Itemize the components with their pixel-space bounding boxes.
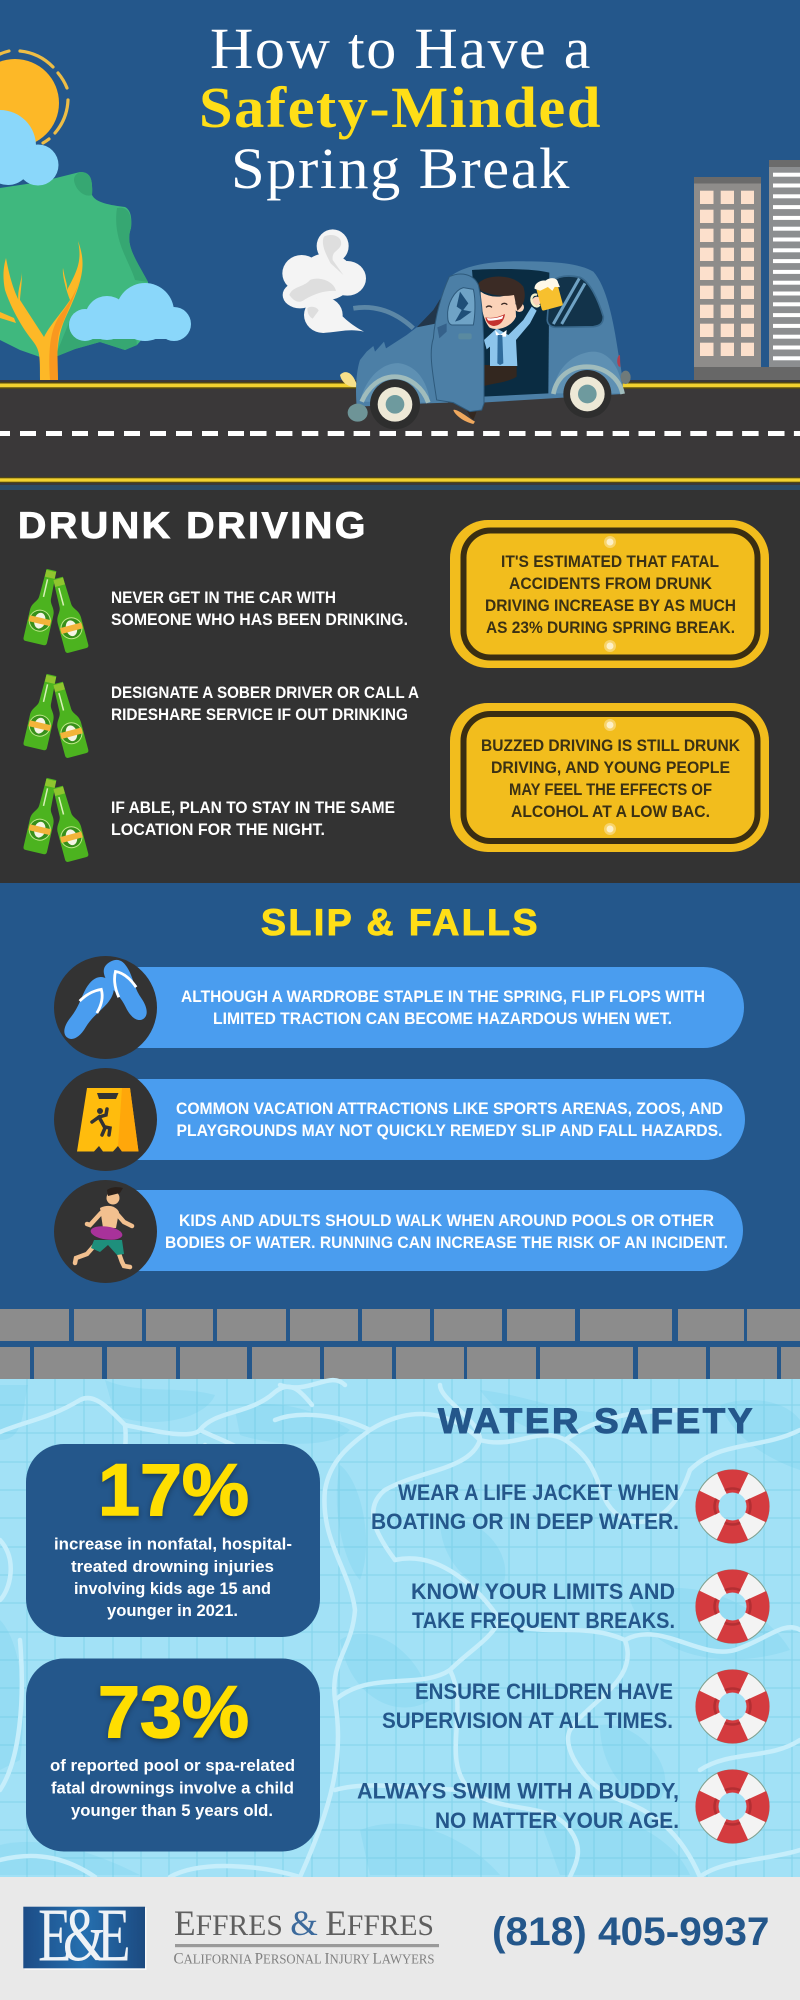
icon: beer bottles 2	[23, 672, 89, 759]
text: wet floor tip	[176, 1100, 723, 1140]
callout: buzzed driving sign: DRIVING, AND YOUNG PEOPLE	[491, 759, 730, 777]
text: 73% description: of reported pool or spa-related	[50, 1757, 295, 1775]
heading: drunk driving: DRUNK DRIVING	[18, 505, 368, 546]
icon: life preserver 4	[696, 1770, 769, 1843]
text: tip 1: NEVER GET IN THE CAR WITH	[111, 589, 336, 607]
text: running tip	[165, 1212, 728, 1252]
icon: life preserver 3	[696, 1670, 769, 1743]
logo: E&E badge: E&E	[38, 1894, 128, 1978]
callout: fatal accidents sign: DRIVING INCREASE BY AS MUCH	[485, 597, 736, 615]
stat number: 73%: 73%	[98, 1672, 249, 1753]
logo: firm name: EFFRES & EFFRES	[174, 1903, 434, 1943]
text: tip 3: LOCATION FOR THE NIGHT.	[111, 821, 325, 839]
icon: beer bottles 3	[23, 776, 89, 863]
text: tip 2: RIDESHARE SERVICE IF OUT DRINKING	[111, 706, 408, 724]
icon: cloud left	[0, 110, 58, 186]
icon: wet floor sign	[77, 1088, 138, 1152]
phone number: (818) 405-9937	[492, 1910, 770, 1954]
pool water pattern	[0, 1379, 800, 1877]
text: running tip: BODIES OF WATER. RUNNING CAN INCREASE THE RISK OF AN INCIDENT.	[165, 1234, 728, 1252]
heading: water safety: WATER SAFETY	[438, 1402, 755, 1441]
icon: car door	[431, 274, 484, 412]
callout: buzzed driving sign: MAY FEEL THE EFFECTS OF	[509, 781, 712, 799]
text: 73% description	[50, 1757, 295, 1820]
title	[199, 16, 602, 201]
text: life jacket tip	[371, 1480, 679, 1534]
logo: firm name: CALIFORNIA PERSONAL INJURY LAWYERS	[174, 1950, 434, 1967]
panel: header background	[0, 0, 800, 490]
icon: tree	[0, 172, 150, 380]
row: flip flops	[54, 956, 744, 1059]
icon: rear wheel	[563, 370, 611, 418]
icon: driver with beer	[467, 276, 565, 420]
text: life jacket tip: BOATING OR IN DEEP WATER.	[371, 1509, 679, 1534]
icon: buildings	[694, 160, 800, 380]
icon: engine smoke	[282, 229, 366, 333]
text: supervision tip: ENSURE CHILDREN HAVE	[415, 1679, 673, 1704]
callout: buzzed driving sign: BUZZED DRIVING IS STILL DRUNK	[481, 737, 740, 755]
text: limits tip: TAKE FREQUENT BREAKS.	[412, 1608, 675, 1633]
heading: slip and falls: SLIP & FALLS	[261, 902, 540, 943]
text: tip 1	[111, 589, 408, 629]
icon: running swimmer	[75, 1187, 132, 1267]
row: running by pools	[54, 1180, 743, 1283]
road	[0, 380, 800, 490]
text: 17% description	[54, 1536, 292, 1620]
icon: beer bottles 1	[23, 567, 89, 654]
callout: fatal accidents sign: ACCIDENTS FROM DRUNK	[509, 575, 712, 593]
icon: flip flops	[57, 956, 154, 1045]
text: 17% description: increase in nonfatal, hospital-	[54, 1536, 292, 1554]
text: limits tip	[411, 1579, 675, 1633]
callout: buzzed driving sign	[450, 703, 769, 852]
row: wet floor hazards	[54, 1068, 745, 1171]
title: How to Have a	[210, 16, 592, 81]
panel: water safety	[0, 1379, 800, 1877]
panel: slip and falls	[0, 883, 800, 1379]
text: supervision tip: SUPERVISION AT ALL TIMES.	[382, 1708, 673, 1733]
icon: life preserver 2	[696, 1570, 769, 1643]
icon: front wheel	[370, 379, 420, 429]
panel: drunk driving	[0, 490, 800, 883]
pool edge bricks	[0, 1309, 800, 1379]
text: 17% description: younger in 2021.	[107, 1602, 238, 1620]
text: wet floor tip: COMMON VACATION ATTRACTIONS LIKE SPORTS ARENAS, ZOOS, AND	[176, 1100, 723, 1118]
text: 73% description: fatal drownings involve a child	[51, 1780, 294, 1798]
stat number: 17%: 17%	[98, 1450, 249, 1531]
callout: fatal accidents sign: AS 23% DURING SPRING BREAK.	[486, 619, 735, 637]
title: Spring Break	[231, 136, 571, 201]
text: limits tip: KNOW YOUR LIMITS AND	[411, 1579, 675, 1604]
callout: buzzed driving sign: ALCOHOL AT A LOW BAC.	[511, 803, 710, 821]
text: buddy tip: ALWAYS SWIM WITH A BUDDY,	[357, 1778, 679, 1804]
illustration: broken-down car with driver	[282, 229, 631, 429]
title: Safety-Minded	[199, 75, 602, 140]
text: flip flops tip: LIMITED TRACTION CAN BECOME HAZARDOUS WHEN WET.	[213, 1010, 672, 1028]
stat card: 17%	[26, 1444, 320, 1637]
text: tip 2	[111, 684, 419, 724]
text: tip 3	[111, 799, 395, 839]
text: flip flops tip	[181, 988, 705, 1028]
text: tip 1: SOMEONE WHO HAS BEEN DRINKING.	[111, 611, 408, 629]
text: running tip: KIDS AND ADULTS SHOULD WALK WHEN AROUND POOLS OR OTHER	[179, 1212, 714, 1230]
text: 17% description: involving kids age 15 and	[74, 1580, 271, 1598]
text: supervision tip	[382, 1679, 673, 1733]
logo: firm name	[174, 1903, 439, 1967]
text: tip 3: IF ABLE, PLAN TO STAY IN THE SAME	[111, 799, 395, 817]
panel: footer	[0, 1877, 800, 2000]
text: wet floor tip: PLAYGROUNDS MAY NOT QUICKLY REMEDY SLIP AND FALL HAZARDS.	[176, 1122, 722, 1140]
text: buddy tip	[357, 1778, 679, 1833]
text: tip 2: DESIGNATE A SOBER DRIVER OR CALL A	[111, 684, 419, 702]
text: 17% description: treated drowning injuries	[71, 1558, 274, 1576]
callout: fatal accidents sign	[450, 520, 769, 668]
icon: life preserver 1	[696, 1470, 769, 1543]
stat card: 73%	[26, 1658, 320, 1852]
icon: cloud right	[69, 283, 191, 341]
text: 73% description: younger than 5 years old.	[71, 1802, 273, 1820]
text: flip flops tip: ALTHOUGH A WARDROBE STAPLE IN THE SPRING, FLIP FLOPS WITH	[181, 988, 705, 1006]
icon: sun	[0, 51, 68, 147]
text: life jacket tip: WEAR A LIFE JACKET WHEN	[398, 1480, 679, 1505]
text: buddy tip: NO MATTER YOUR AGE.	[435, 1808, 679, 1833]
callout: fatal accidents sign: IT'S ESTIMATED THAT FATAL	[501, 553, 719, 571]
